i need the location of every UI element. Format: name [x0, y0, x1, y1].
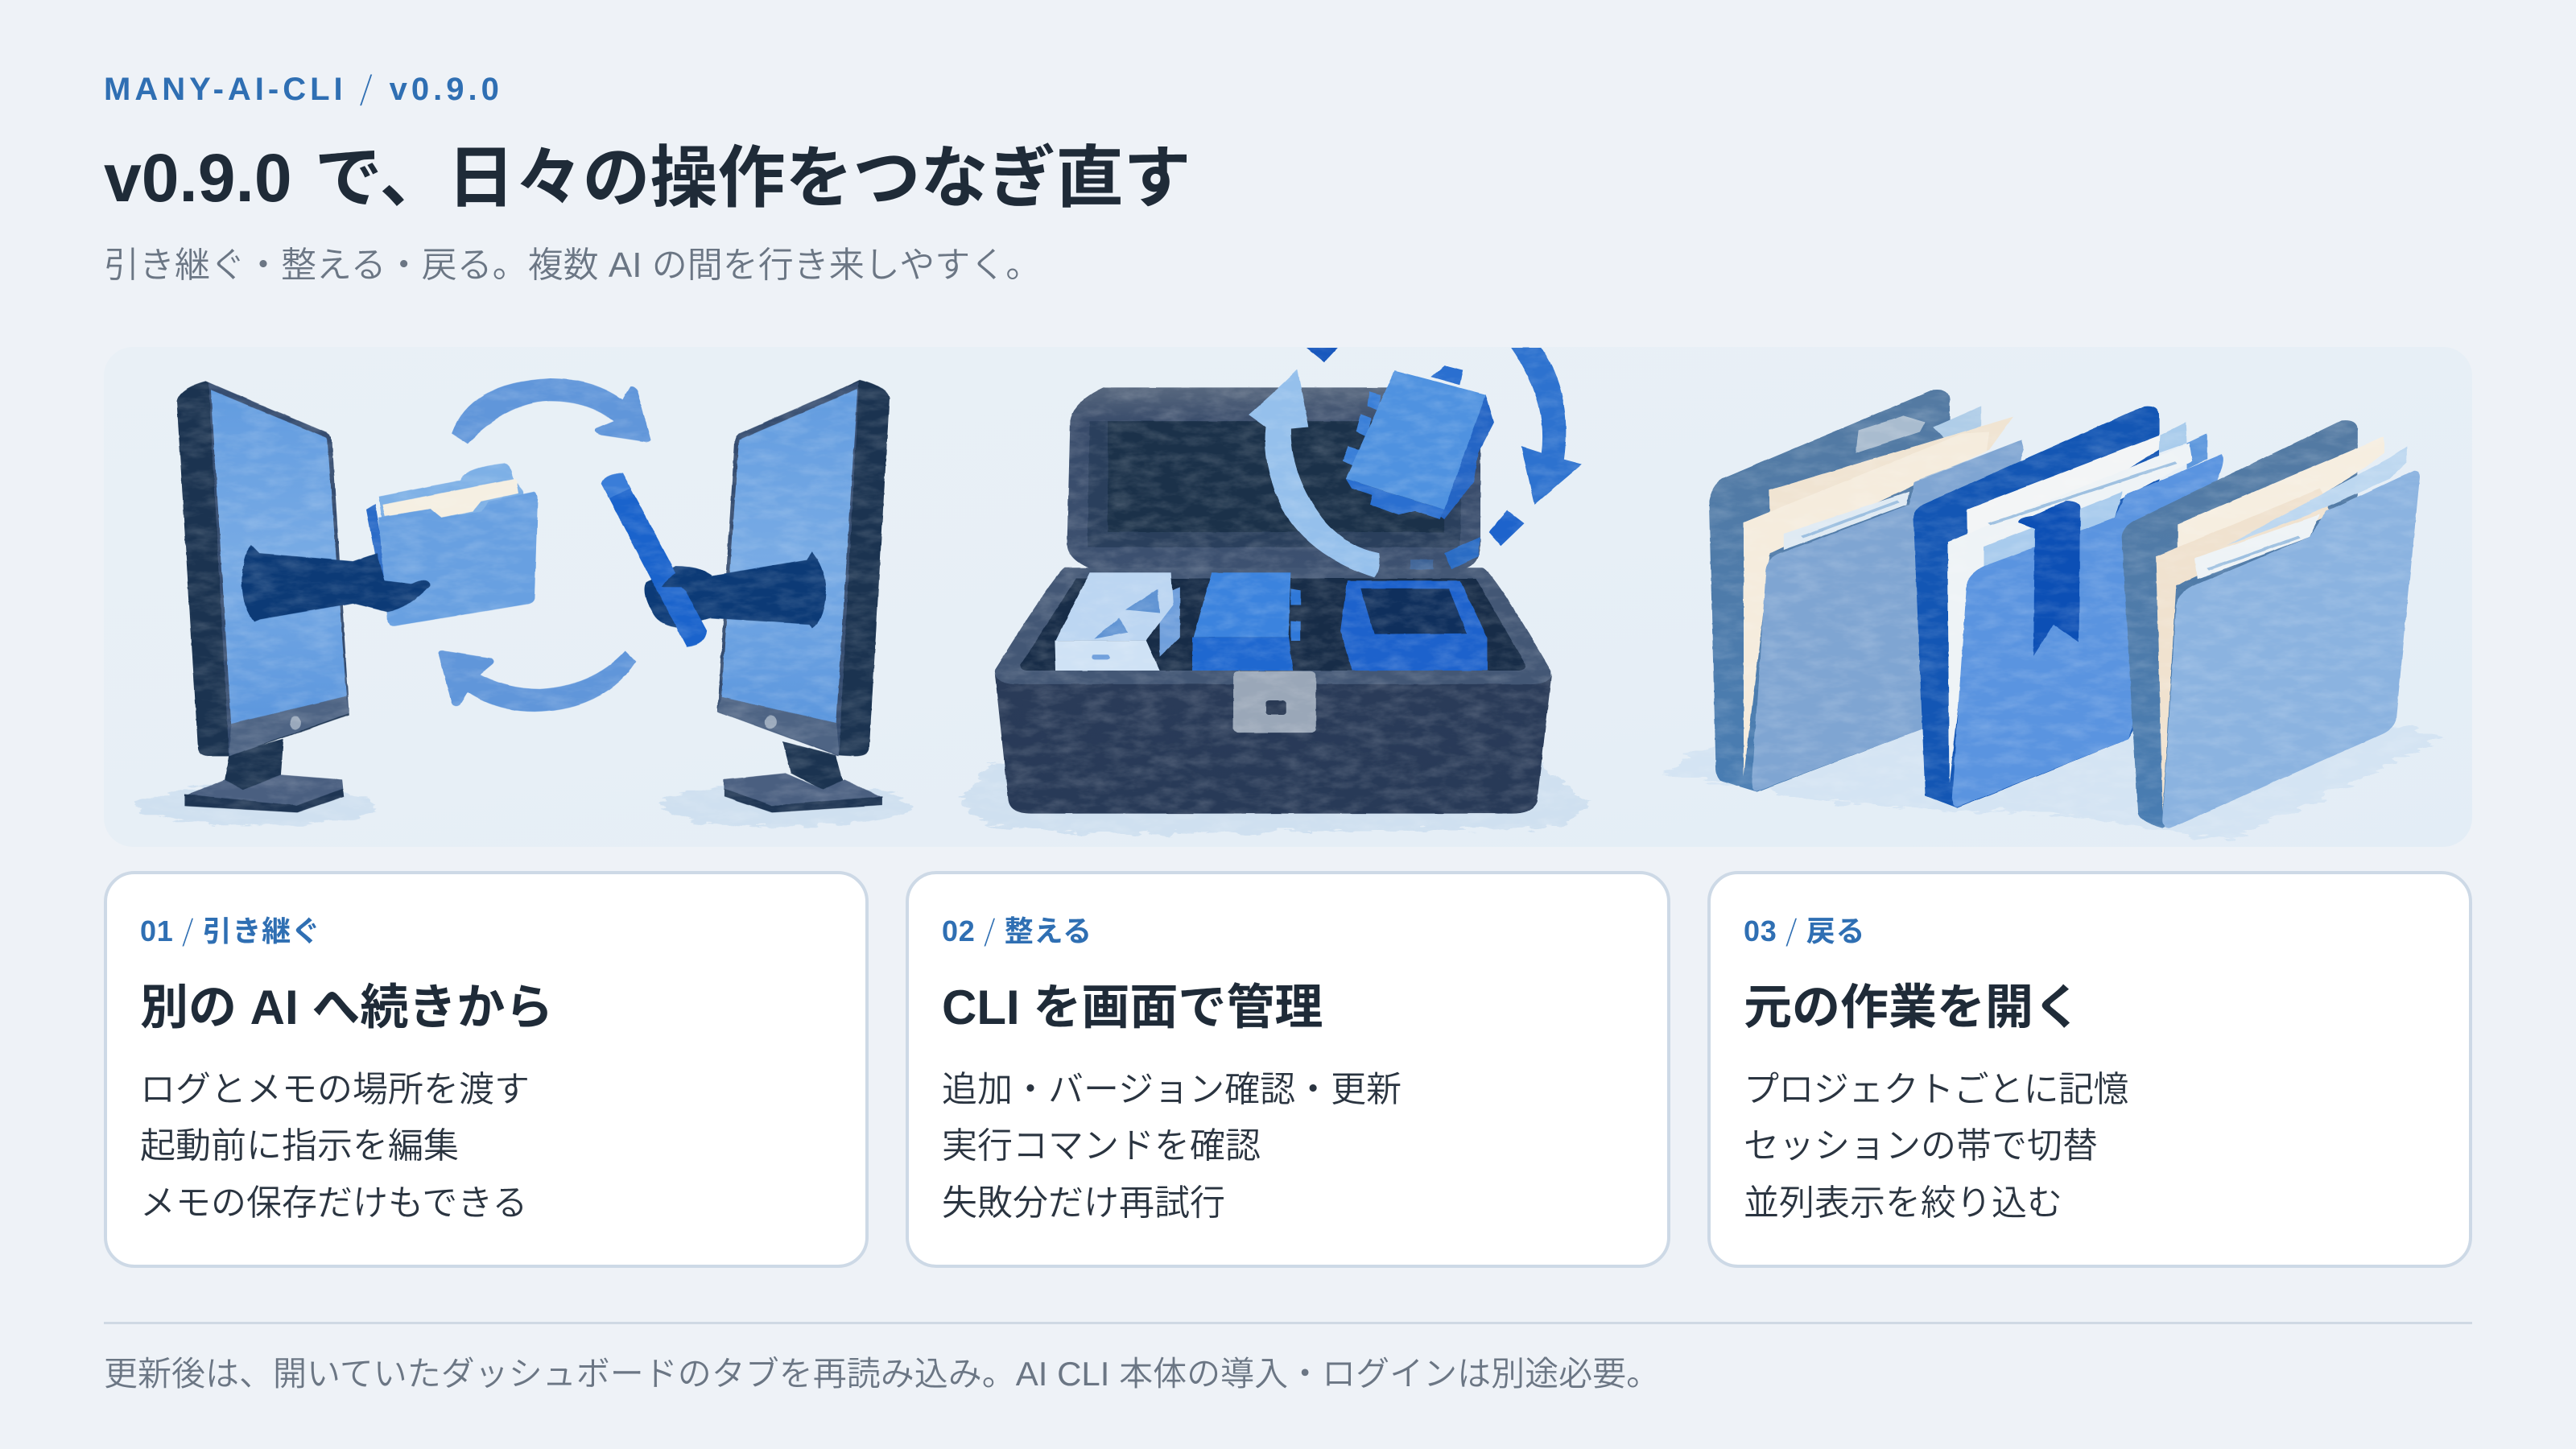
card 1 list — [140, 1070, 530, 1223]
folder 2 with bookmark — [1913, 406, 2223, 808]
clasp — [1233, 671, 1316, 733]
hand: right arm with baton — [601, 473, 826, 647]
scene: two monitors handing over — [137, 378, 911, 827]
block: hollow — [1340, 580, 1487, 671]
ground shadow — [961, 763, 1589, 835]
toolbox lid — [1067, 387, 1480, 569]
card 1 kicker: 01 / 引き継ぐ — [140, 908, 321, 950]
card 3 kicker: 03 / 戻る — [1744, 908, 1865, 950]
left monitor — [176, 381, 349, 812]
subtitle: 引き継ぐ・整える・戻る。複数 AI の間を行き来しやすく。 — [104, 246, 1041, 285]
card 2 list — [942, 1070, 1402, 1223]
card 2: organize — [906, 871, 1670, 1268]
card 2 list: 失敗分だけ再試行 — [942, 1183, 1225, 1223]
card 3 heading: 元の作業を開く — [1744, 980, 2082, 1034]
card 3 list: プロジェクトごとに記憶 — [1744, 1070, 2128, 1109]
card 1 list: 起動前に指示を編集 — [140, 1126, 459, 1166]
floating block — [1343, 365, 1494, 519]
footer note: 更新後は、開いていたダッシュボードのタブを再読み込み。AI CLI 本体の導入・ログインは別途必要。 — [104, 1355, 1660, 1393]
card 1: hand over — [104, 871, 869, 1268]
card 1 heading: 別の AI へ続きから — [140, 980, 553, 1034]
block: mid blue — [1192, 572, 1301, 671]
card 3 list — [1744, 1070, 2128, 1223]
card 3: return — [1707, 871, 2472, 1268]
folder — [366, 463, 538, 626]
card 1 list: ログとメモの場所を渡す — [140, 1070, 530, 1109]
ground shadow — [1664, 724, 2443, 841]
card 2 list: 実行コマンドを確認 — [942, 1126, 1261, 1166]
arrow: light up — [1249, 369, 1379, 577]
card 3 list: 並列表示を絞り込む — [1744, 1183, 2062, 1223]
scene: toolbox with blocks — [961, 348, 1589, 835]
ground shadows — [137, 784, 911, 827]
right monitor — [717, 379, 890, 812]
illustration panel — [134, 348, 2472, 1268]
title: v0.9.0 で、日々の操作をつなぎ直す — [104, 140, 1191, 216]
folder 1 — [1709, 390, 2024, 792]
hand: left arm with folder — [242, 545, 431, 621]
card 2 list: 追加・バージョン確認・更新 — [942, 1070, 1402, 1109]
scene: three folders — [1664, 390, 2443, 841]
card 1 list: メモの保存だけもできる — [140, 1183, 527, 1223]
card 2 kicker: 02 / 整える — [942, 908, 1092, 950]
arrow: blue down — [1511, 348, 1582, 505]
folder 3 — [2122, 420, 2420, 828]
arrow: bottom — [439, 650, 636, 712]
arrow: top — [452, 378, 651, 444]
card 3 list: セッションの帯で切替 — [1744, 1126, 2098, 1166]
card 2 heading: CLI を画面で管理 — [942, 980, 1323, 1034]
block: light — [1055, 572, 1180, 671]
eyebrow: MANY-AI-CLI / v0.9.0 — [104, 63, 503, 109]
toolbox body — [995, 568, 1552, 814]
small pieces — [1307, 348, 1524, 569]
